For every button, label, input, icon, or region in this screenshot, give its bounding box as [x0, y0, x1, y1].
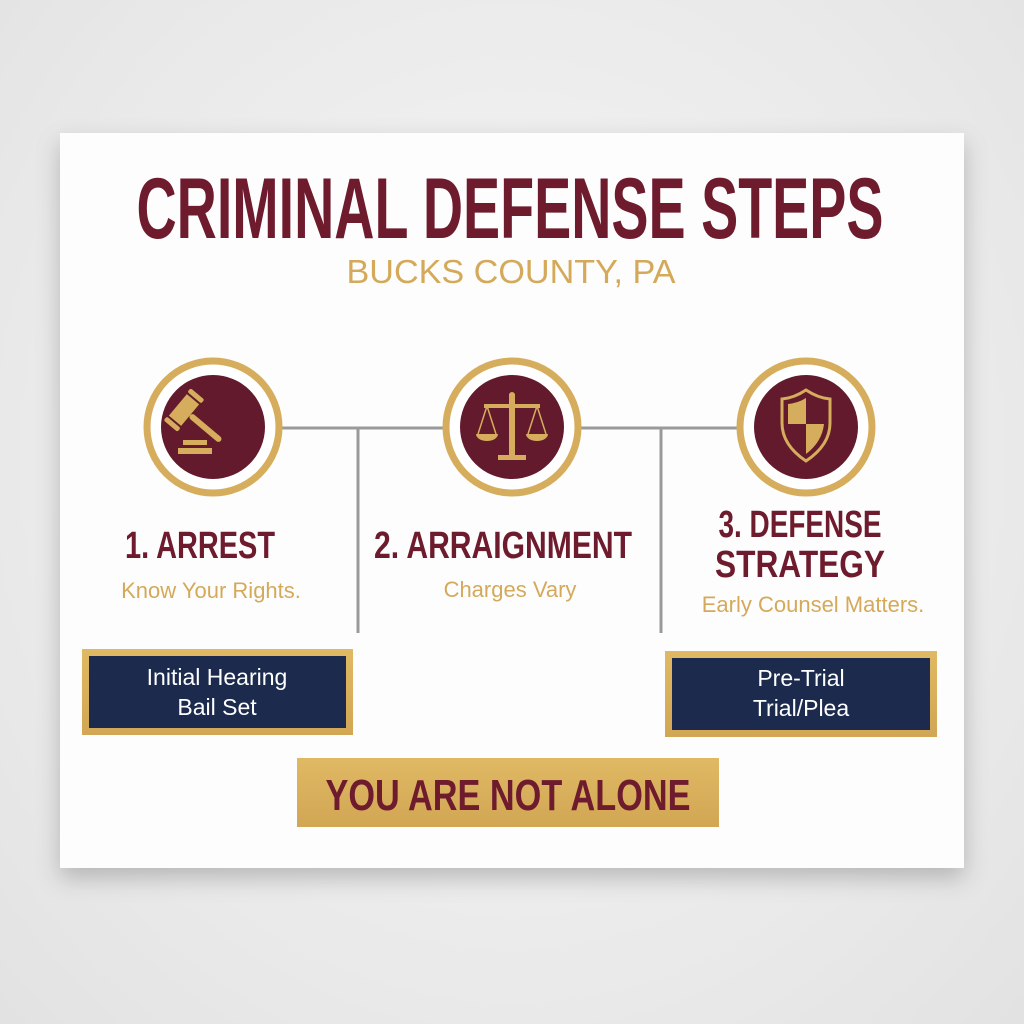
- step 1 text: Know Your Rights.: [121, 578, 301, 603]
- step 1 heading: 1. ARREST: [125, 525, 275, 567]
- subtitle: BUCKS COUNTY, PA: [346, 253, 676, 290]
- box: initial hearing: Initial Hearing: [147, 664, 287, 690]
- box: initial hearing: [82, 649, 353, 735]
- text: STRATEGY: [715, 544, 885, 586]
- card panel: [60, 133, 964, 868]
- banner: you are not alone: YOU ARE NOT ALONE: [326, 771, 690, 820]
- banner: you are not alone: [297, 758, 719, 827]
- step 3 heading: 3. DEFENSE: [718, 504, 882, 546]
- box: initial hearing: Bail Set: [177, 694, 257, 720]
- icon: gavel: [147, 361, 279, 493]
- step 2 text: Charges Vary: [444, 577, 576, 602]
- timeline connectors: [280, 428, 745, 633]
- icon: scales: [446, 361, 578, 493]
- step 2 heading: 2. ARRAIGNMENT: [374, 525, 632, 567]
- box: pre-trial: Trial/Plea: [753, 695, 849, 721]
- box: pre-trial: Pre-Trial: [757, 665, 845, 691]
- box: pre-trial: [665, 651, 937, 737]
- step 3 text: Early Counsel Matters.: [702, 592, 924, 617]
- icon: shield: [740, 361, 872, 493]
